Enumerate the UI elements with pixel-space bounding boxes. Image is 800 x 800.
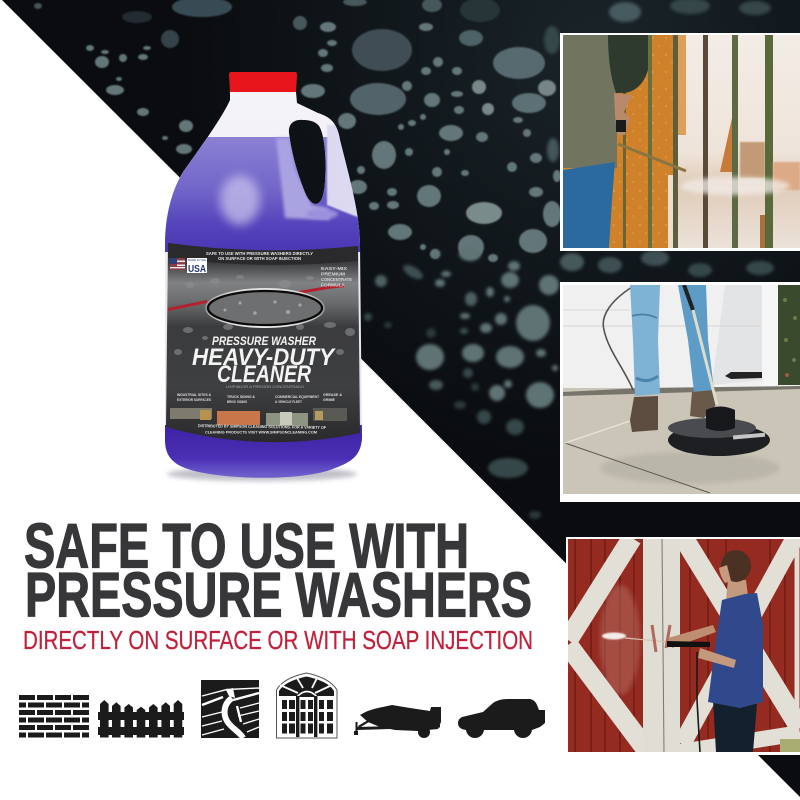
icon: boat on trailer <box>354 705 441 738</box>
water droplets <box>34 0 561 262</box>
label use photos <box>170 408 347 426</box>
easy-mix callout <box>321 266 352 288</box>
white X braces <box>568 532 800 752</box>
photo: pressure washing a fence <box>560 33 800 251</box>
label panel <box>166 243 360 442</box>
arms <box>668 625 716 648</box>
label use columns: GRIME <box>323 398 335 402</box>
label use columns: & VEHICLE FLEET <box>275 400 303 404</box>
purple liquid <box>160 137 370 252</box>
headline <box>24 512 532 630</box>
label use columns: BRICK SIDING <box>227 400 247 404</box>
USA badge <box>170 258 207 275</box>
bottle cap <box>229 72 297 92</box>
easy-mix callout: FORMULA <box>321 282 346 288</box>
label top notice: SAFE TO USE WITH PRESSURE WASHERS DIRECTLY <box>206 251 313 256</box>
hose <box>697 652 700 752</box>
neck <box>726 580 748 600</box>
icon: house gutter and downspout <box>201 680 259 738</box>
label product name <box>192 334 336 388</box>
chrome oval emblem <box>205 288 325 328</box>
label use columns: EXTERIOR SURFACES <box>177 398 211 402</box>
label top notice <box>206 251 313 261</box>
concrete joints <box>565 443 710 493</box>
spray lance <box>618 144 686 171</box>
bottle base <box>165 425 362 478</box>
man <box>667 550 763 752</box>
red swoosh <box>168 285 345 311</box>
fence planks <box>610 35 800 248</box>
label use columns: INDUSTRIAL SITES & <box>177 393 211 397</box>
easy-mix callout: EASY-MIX <box>321 266 347 271</box>
USA badge: MADE IN THE <box>188 258 206 262</box>
arm and hand <box>614 93 632 135</box>
label use columns: TRUCK SIDING & <box>227 395 255 399</box>
icon: brick wall <box>19 695 89 738</box>
surface cleaner machine <box>668 406 770 456</box>
easy-mix callout: CONCENTRATE <box>321 277 352 282</box>
photo: washing a red barn door <box>566 532 800 755</box>
headline: SAFE TO USE WITH <box>24 512 469 582</box>
label distributor line <box>198 423 327 434</box>
label product name: CLEANER <box>217 361 312 388</box>
shirt <box>563 35 617 168</box>
red planks <box>568 539 800 752</box>
blurred droplets lower area <box>364 0 774 519</box>
label distributor line: CLEANING PRODUCTS VISIT WWW.SIMPSONCLEANING.COM <box>205 430 318 434</box>
label use columns <box>177 393 342 404</box>
icon: picket fence <box>98 700 184 738</box>
bottle ground shadow <box>167 467 357 481</box>
shirt <box>708 593 763 708</box>
head <box>721 550 751 582</box>
centre post <box>643 539 680 752</box>
label product name: HEAVY-DUTY <box>192 344 336 371</box>
icon: SUV <box>458 699 545 738</box>
subheading: DIRECTLY ON SURFACE OR WITH SOAP INJECTION <box>23 625 533 655</box>
easy-mix callout: PREMIUM <box>321 272 345 276</box>
label spanish line: LIMPIADOR A PRESIÓN CONCENTRADO <box>226 384 304 389</box>
icon: arched window <box>276 673 337 738</box>
photo: surface cleaner on driveway <box>560 282 800 502</box>
hose <box>603 287 633 390</box>
grass <box>780 739 800 752</box>
hinge <box>725 372 762 379</box>
bottle plastic body <box>160 90 370 485</box>
label distributor line: DISTRIBUTED BY SIMPSON CLEANING SOLUTIONS. FOR A VARIETY OF <box>198 423 327 430</box>
label top notice: ON SURFACE OR WITH SOAP INJECTION <box>218 256 302 261</box>
sleeve <box>608 35 648 93</box>
jeans legs <box>630 285 660 396</box>
hedge <box>778 285 800 385</box>
window fan arch <box>279 676 334 696</box>
spray gun <box>667 641 710 647</box>
splash marks <box>652 625 670 652</box>
jeans <box>563 162 615 248</box>
boots <box>630 396 658 432</box>
label use columns: GREASE & <box>323 393 342 397</box>
water spray <box>680 177 790 195</box>
garage door wall <box>563 285 800 388</box>
jeans <box>713 700 757 752</box>
label droplets <box>174 275 355 355</box>
water spray <box>602 632 626 640</box>
window panes <box>282 696 333 737</box>
product bottle <box>160 72 370 485</box>
label product name: PRESSURE WASHER <box>212 334 316 348</box>
label use columns: COMMERCIAL EQUIPMENT <box>275 395 320 399</box>
headline: PRESSURE WASHERS <box>25 560 532 630</box>
wand <box>684 285 693 310</box>
USA badge: USA <box>188 264 206 275</box>
concrete ground <box>563 388 800 494</box>
